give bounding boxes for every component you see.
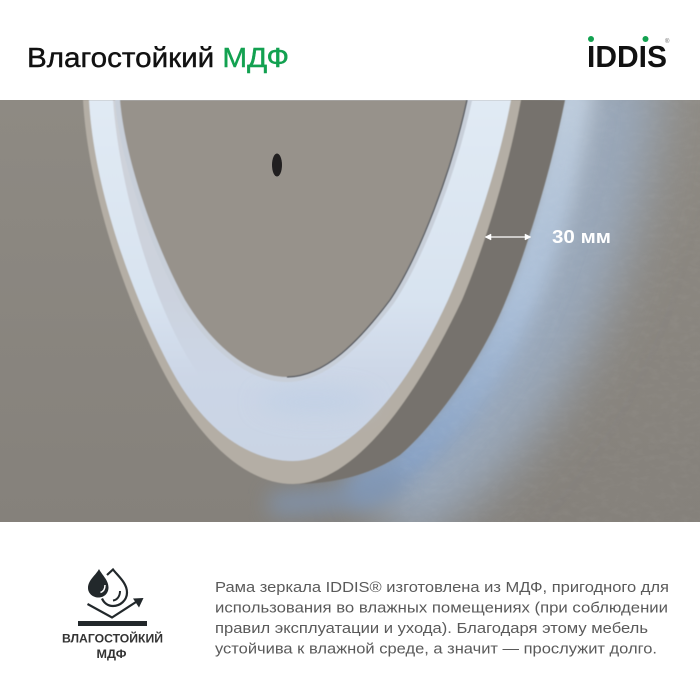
frame blue reflection bbox=[257, 388, 373, 416]
body text: устойчива к влажной среде, а значит — прослужит долго. bbox=[215, 642, 657, 658]
mirror surface bbox=[120, 100, 467, 377]
icon label bbox=[62, 630, 163, 661]
icon label: ВЛАГОСТОЙКИЙ bbox=[62, 630, 163, 646]
frame beige band bbox=[83, 100, 521, 484]
body text bbox=[215, 580, 669, 658]
photo: illuminated round mirror bbox=[0, 60, 700, 522]
mirror edge bbox=[287, 100, 467, 377]
body text: использования во влажных помещениях (при соблюдении bbox=[215, 600, 668, 616]
mirror assembly bbox=[83, 100, 565, 484]
logo: IDDIS: IDDIS bbox=[587, 39, 667, 74]
body text: Рама зеркала IDDIS® изготовлена из МДФ, пригодного для bbox=[215, 580, 669, 596]
dimension label: 30 мм bbox=[552, 226, 611, 247]
icon: chevron arrow bbox=[88, 602, 136, 618]
icon label: МДФ bbox=[96, 647, 127, 661]
body text: правил эксплуатации и ухода). Благодаря этому мебель bbox=[215, 621, 648, 637]
icon: outline drop bbox=[102, 570, 127, 606]
touch button bbox=[272, 154, 282, 176]
wall glow bbox=[270, 60, 700, 522]
frame inner bevel bbox=[113, 100, 206, 338]
dimension arrow bbox=[485, 234, 531, 240]
icon: base bar bbox=[78, 621, 147, 626]
title: Влагостойкий МДФ bbox=[27, 42, 289, 73]
wall bbox=[0, 100, 700, 522]
icon: dark drop bbox=[88, 569, 108, 598]
frame shadow side bbox=[293, 100, 565, 484]
logo: IDDIS: ® bbox=[665, 38, 670, 45]
icon: moisture resistant MDF bbox=[78, 569, 147, 626]
frame light face bbox=[89, 100, 511, 461]
